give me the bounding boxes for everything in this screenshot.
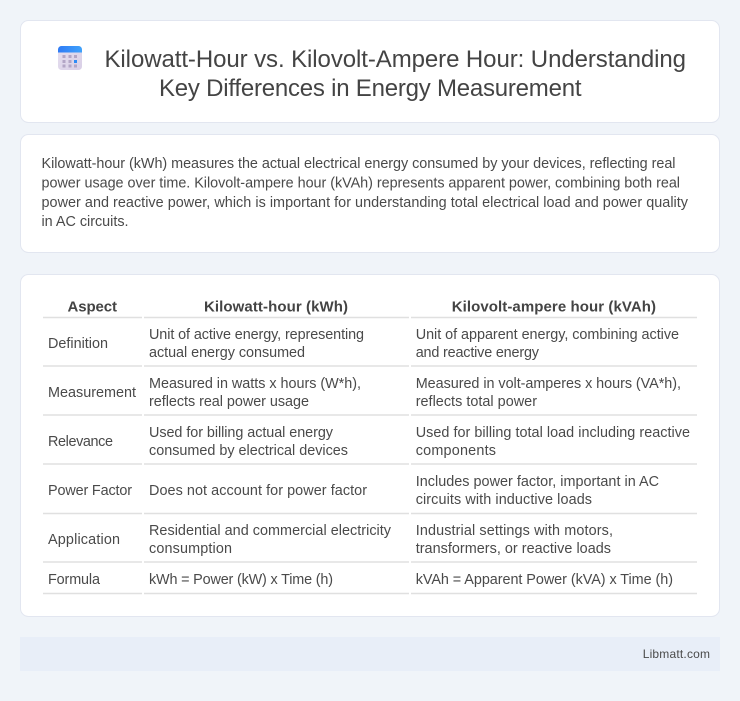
table header — [68, 298, 656, 316]
row: definition: and reactive energy — [416, 345, 540, 361]
intro text: power and reactive power, which is important for understanding total electrical load and power quality — [42, 195, 689, 211]
row: formula: Formula — [48, 572, 100, 588]
row: relevance: components — [416, 443, 496, 459]
row: relevance — [48, 425, 690, 459]
row: relevance: Used for billing total load including reactive — [416, 425, 690, 441]
row: application: transformers, or reactive loads — [416, 541, 611, 557]
row: measurement: Measured in volt-amperes x hours (VA*h), — [416, 376, 681, 392]
row: definition: actual energy consumed — [149, 345, 305, 361]
footer brand: Libmatt.com — [643, 647, 710, 661]
row: measurement: Measurement — [48, 385, 136, 401]
row: power factor: Includes power factor, important in AC — [416, 474, 659, 490]
row: measurement — [48, 376, 681, 410]
intro text: power usage over time. Kilovolt-ampere hour (kVAh) represents apparent power, combining both real — [42, 176, 680, 192]
intro text — [42, 156, 689, 230]
table header: Kilovolt-ampere hour (kVAh) — [452, 298, 656, 316]
row: definition: Definition — [48, 336, 108, 352]
row: application — [48, 523, 613, 557]
intro text: in AC circuits. — [42, 214, 128, 230]
row: power factor — [48, 474, 659, 508]
row: definition: Unit of apparent energy, combining active — [416, 327, 679, 343]
row: relevance: consumed by electrical devices — [149, 443, 348, 459]
panel: comparison table — [20, 274, 720, 616]
intro text: Kilowatt-hour (kWh) measures the actual electrical energy consumed by your devices, reflecting real — [42, 156, 676, 172]
heading — [104, 46, 686, 102]
row: relevance: Relevance — [48, 434, 113, 450]
row: application: Application — [48, 532, 120, 548]
heading: Key Differences in Energy Measurement — [159, 75, 582, 102]
table header: Kilowatt-hour (kWh) — [204, 298, 348, 316]
row: application: Industrial settings with motors, — [416, 523, 613, 539]
row: power factor: Does not account for power factor — [149, 483, 367, 499]
row: formula: kWh = Power (kW) x Time (h) — [149, 572, 333, 588]
row: application: Residential and commercial electricity — [149, 523, 392, 539]
row: definition: Unit of active energy, representing — [149, 327, 364, 343]
row: formula: kVAh = Apparent Power (kVA) x Time (h) — [416, 572, 673, 588]
row: measurement: reflects total power — [416, 394, 537, 410]
panel: title — [20, 20, 720, 122]
heading: Kilowatt-Hour vs. Kilovolt-Ampere Hour: Understanding — [104, 46, 686, 73]
row: relevance: Used for billing actual energy — [149, 425, 334, 441]
row: application: consumption — [149, 541, 232, 557]
panel: introduction — [20, 134, 720, 252]
row: measurement: Measured in watts x hours (W*h), — [149, 376, 361, 392]
row: definition — [48, 327, 679, 361]
row: power factor: Power Factor — [48, 483, 132, 499]
table header: Aspect — [68, 298, 117, 316]
row: formula — [48, 572, 673, 588]
icon: calendar — [58, 46, 82, 70]
row: power factor: circuits with inductive loads — [416, 492, 592, 508]
row: measurement: reflects real power usage — [149, 394, 309, 410]
footer — [20, 637, 720, 671]
